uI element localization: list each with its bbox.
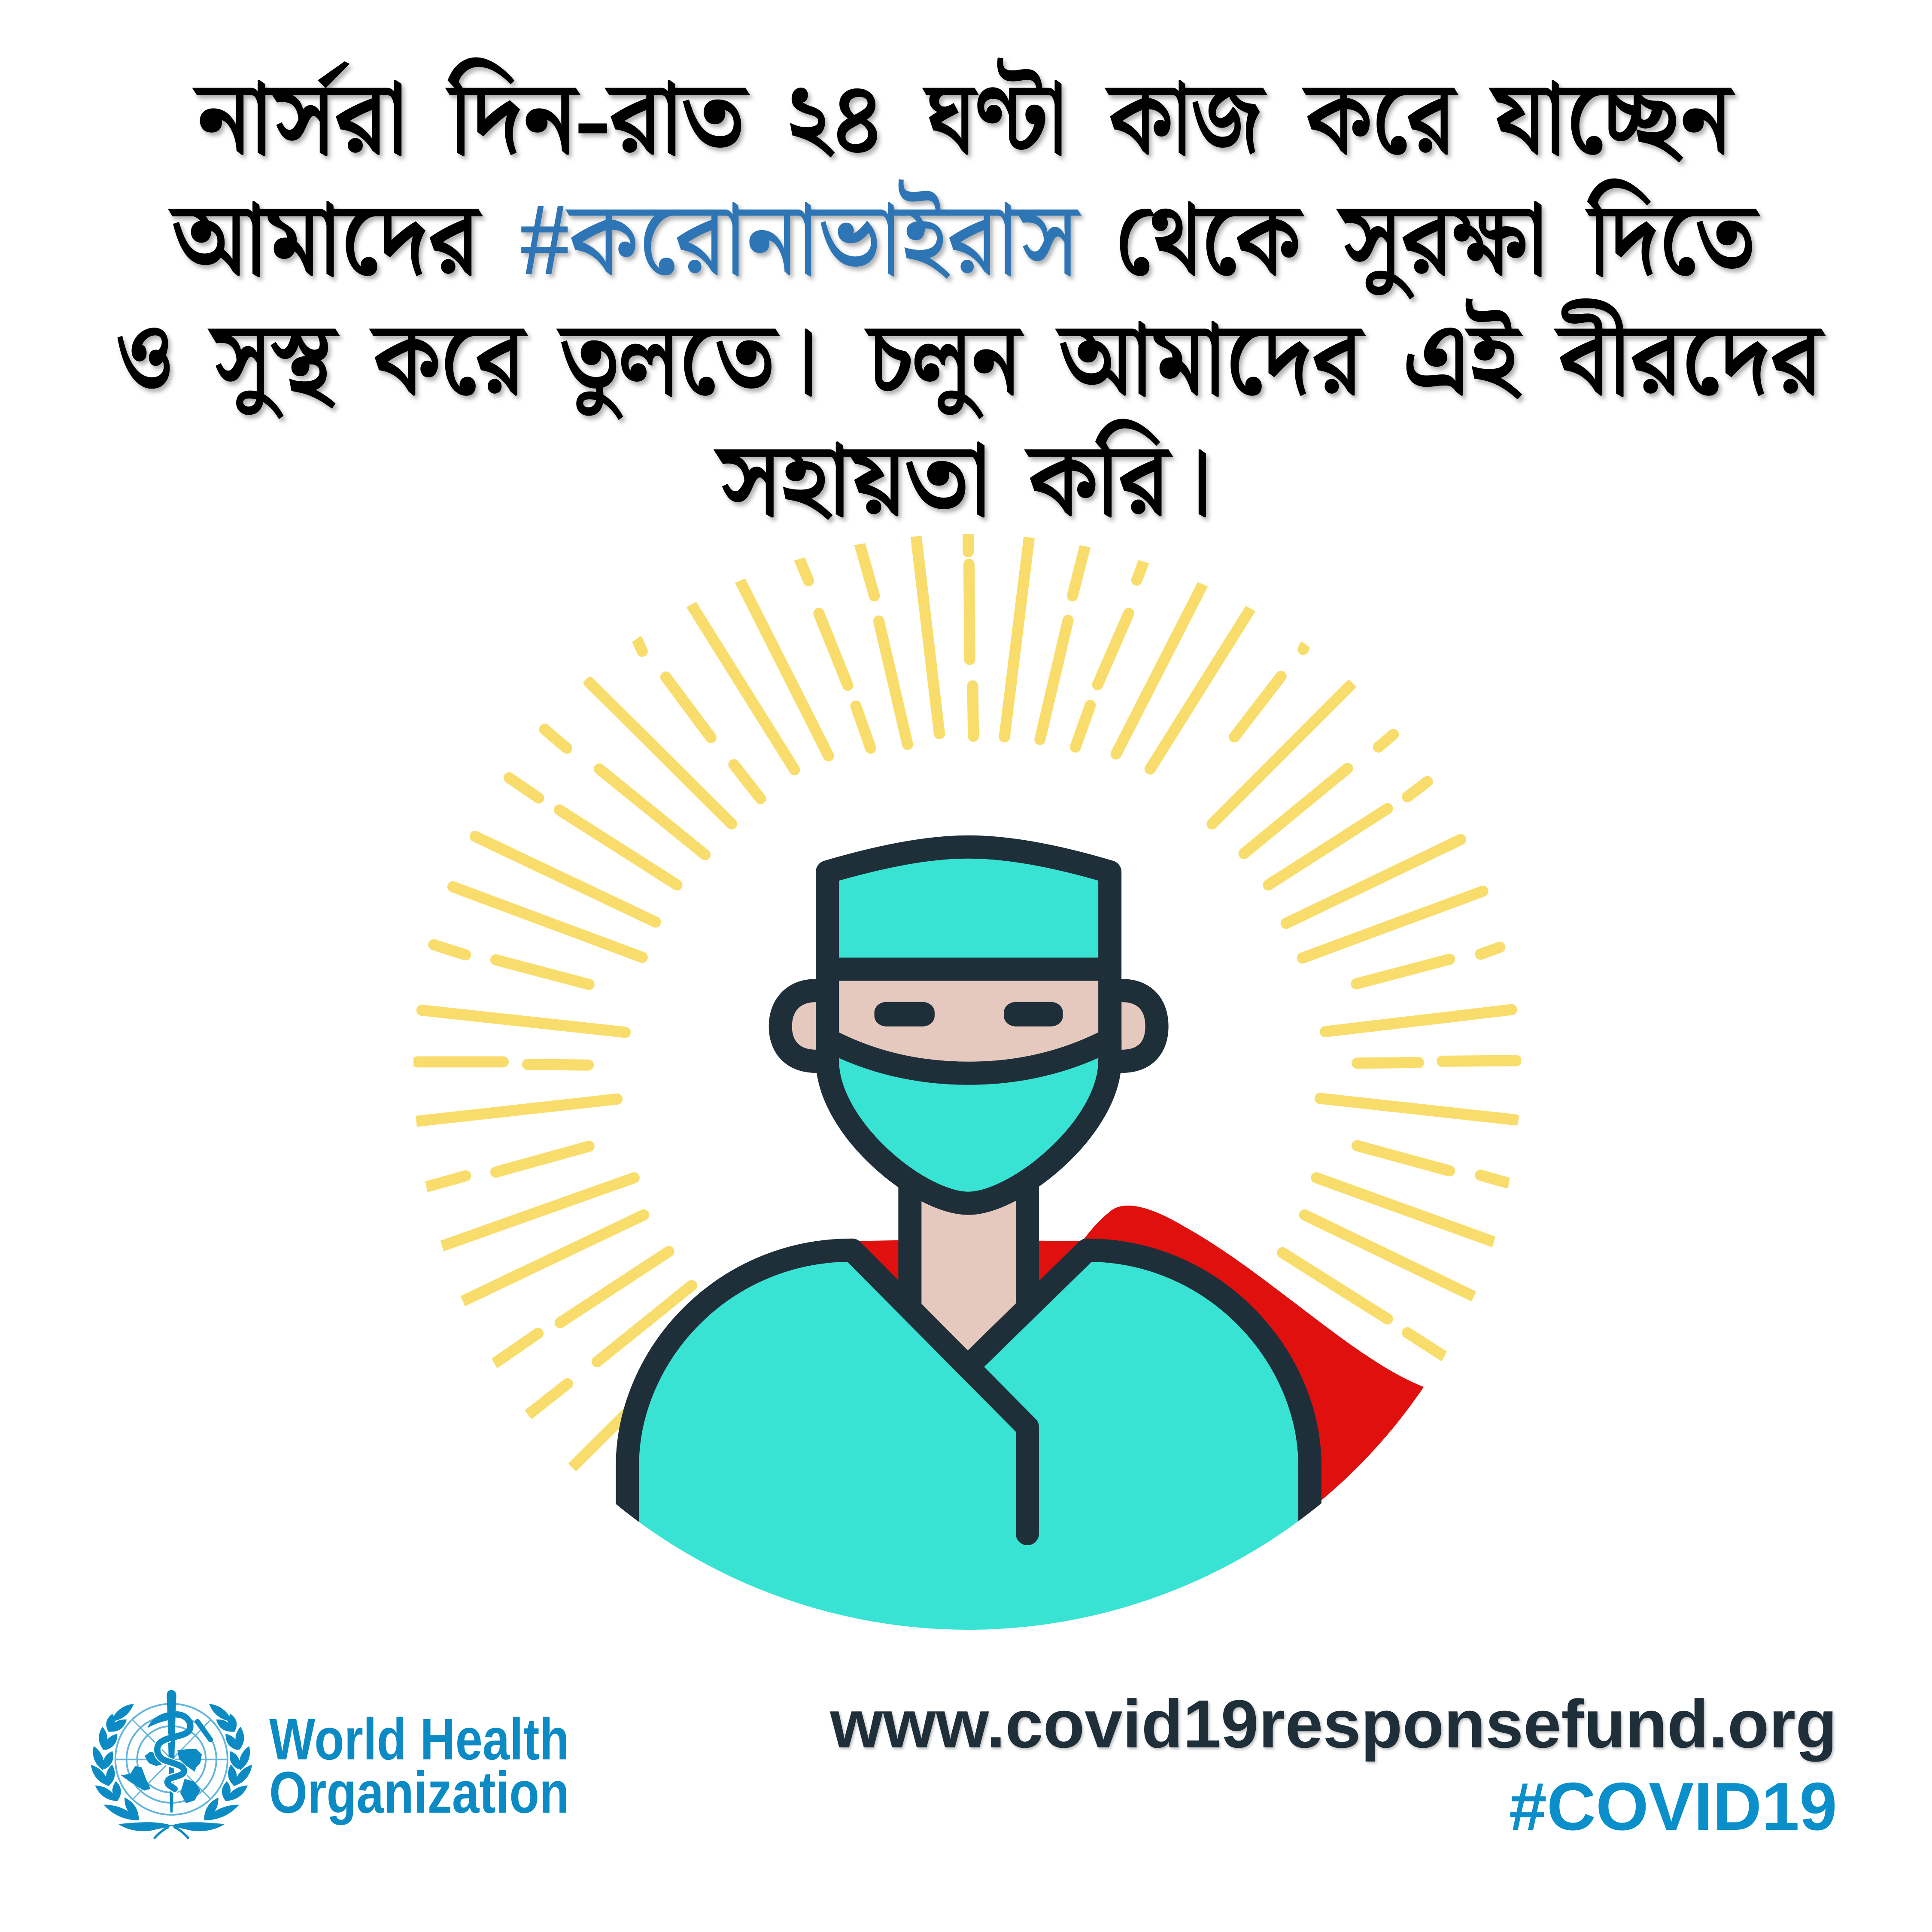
title line 4: সহায়তা bbox=[715, 423, 990, 536]
left ear bbox=[781, 990, 827, 1061]
hashtag: #COVID19 bbox=[1509, 1769, 1837, 1844]
title line 1: করে bbox=[1303, 62, 1457, 175]
title line 1: নার্সরা bbox=[194, 62, 407, 175]
title line 2 with blue hashtag: সুরক্ষা bbox=[1338, 183, 1546, 298]
title line 2 with blue hashtag: থেকে bbox=[1115, 183, 1303, 296]
title line 3: বীরদের bbox=[1555, 300, 1824, 416]
title line 3: ও bbox=[117, 303, 173, 416]
WHO wordmark: Organization bbox=[269, 1760, 569, 1826]
title line 1: ঘণ্টা bbox=[924, 58, 1066, 175]
nurse hero figure bbox=[627, 847, 1424, 1648]
right ear bbox=[1110, 990, 1157, 1061]
eyes bbox=[875, 1002, 1063, 1027]
globe rings bbox=[115, 1704, 228, 1815]
title line 3 bbox=[117, 299, 1824, 419]
right laurel bbox=[200, 1700, 255, 1824]
title line 1 bbox=[194, 58, 1734, 175]
title line 3: করে bbox=[371, 303, 527, 416]
emblem bbox=[88, 1690, 255, 1838]
scrubs torso bbox=[627, 1250, 1310, 1648]
title line 1: দিন-রাত bbox=[447, 58, 748, 175]
ribbon bbox=[118, 1822, 225, 1838]
WHO wordmark: World Health bbox=[269, 1707, 569, 1772]
title line 2 with blue hashtag: আমাদের bbox=[170, 183, 481, 296]
continents bbox=[121, 1766, 151, 1791]
website url: www.covid19responsefund.org bbox=[829, 1686, 1837, 1762]
title line 4: করি। bbox=[1026, 420, 1214, 536]
sunburst rays bbox=[417, 534, 1516, 1466]
WHO logo bbox=[88, 1690, 569, 1838]
title line 3: আমাদের bbox=[1057, 303, 1364, 416]
title line 4 bbox=[715, 420, 1214, 536]
face skin bbox=[827, 969, 1110, 1068]
red cape bbox=[853, 1206, 1424, 1500]
title line 1: কাজ bbox=[1106, 62, 1266, 175]
title line 3: চলুন bbox=[866, 303, 1023, 418]
snake tail bar bbox=[197, 1722, 210, 1740]
surgical cap bbox=[827, 847, 1110, 969]
title: Bengali message bbox=[117, 58, 1824, 536]
left laurel bbox=[88, 1700, 143, 1824]
snake bbox=[147, 1712, 190, 1789]
title line 3: সুস্থ bbox=[209, 303, 338, 418]
title line 1: যাচ্ছেন bbox=[1490, 62, 1734, 175]
title line 3: তুলতে। bbox=[558, 303, 820, 419]
title line 2 with blue hashtag bbox=[170, 179, 1759, 298]
staff bbox=[167, 1690, 176, 1813]
face mask bbox=[827, 1039, 1110, 1203]
title line 3: এই bbox=[1402, 299, 1521, 416]
title line 2 with blue hashtag: #করোনাভাইরাস bbox=[520, 179, 1081, 296]
title line 1: ২৪ bbox=[785, 62, 884, 175]
title line 2 with blue hashtag: দিতে bbox=[1586, 179, 1759, 296]
WHO wordmark bbox=[269, 1707, 569, 1826]
neck bbox=[910, 1188, 1027, 1373]
